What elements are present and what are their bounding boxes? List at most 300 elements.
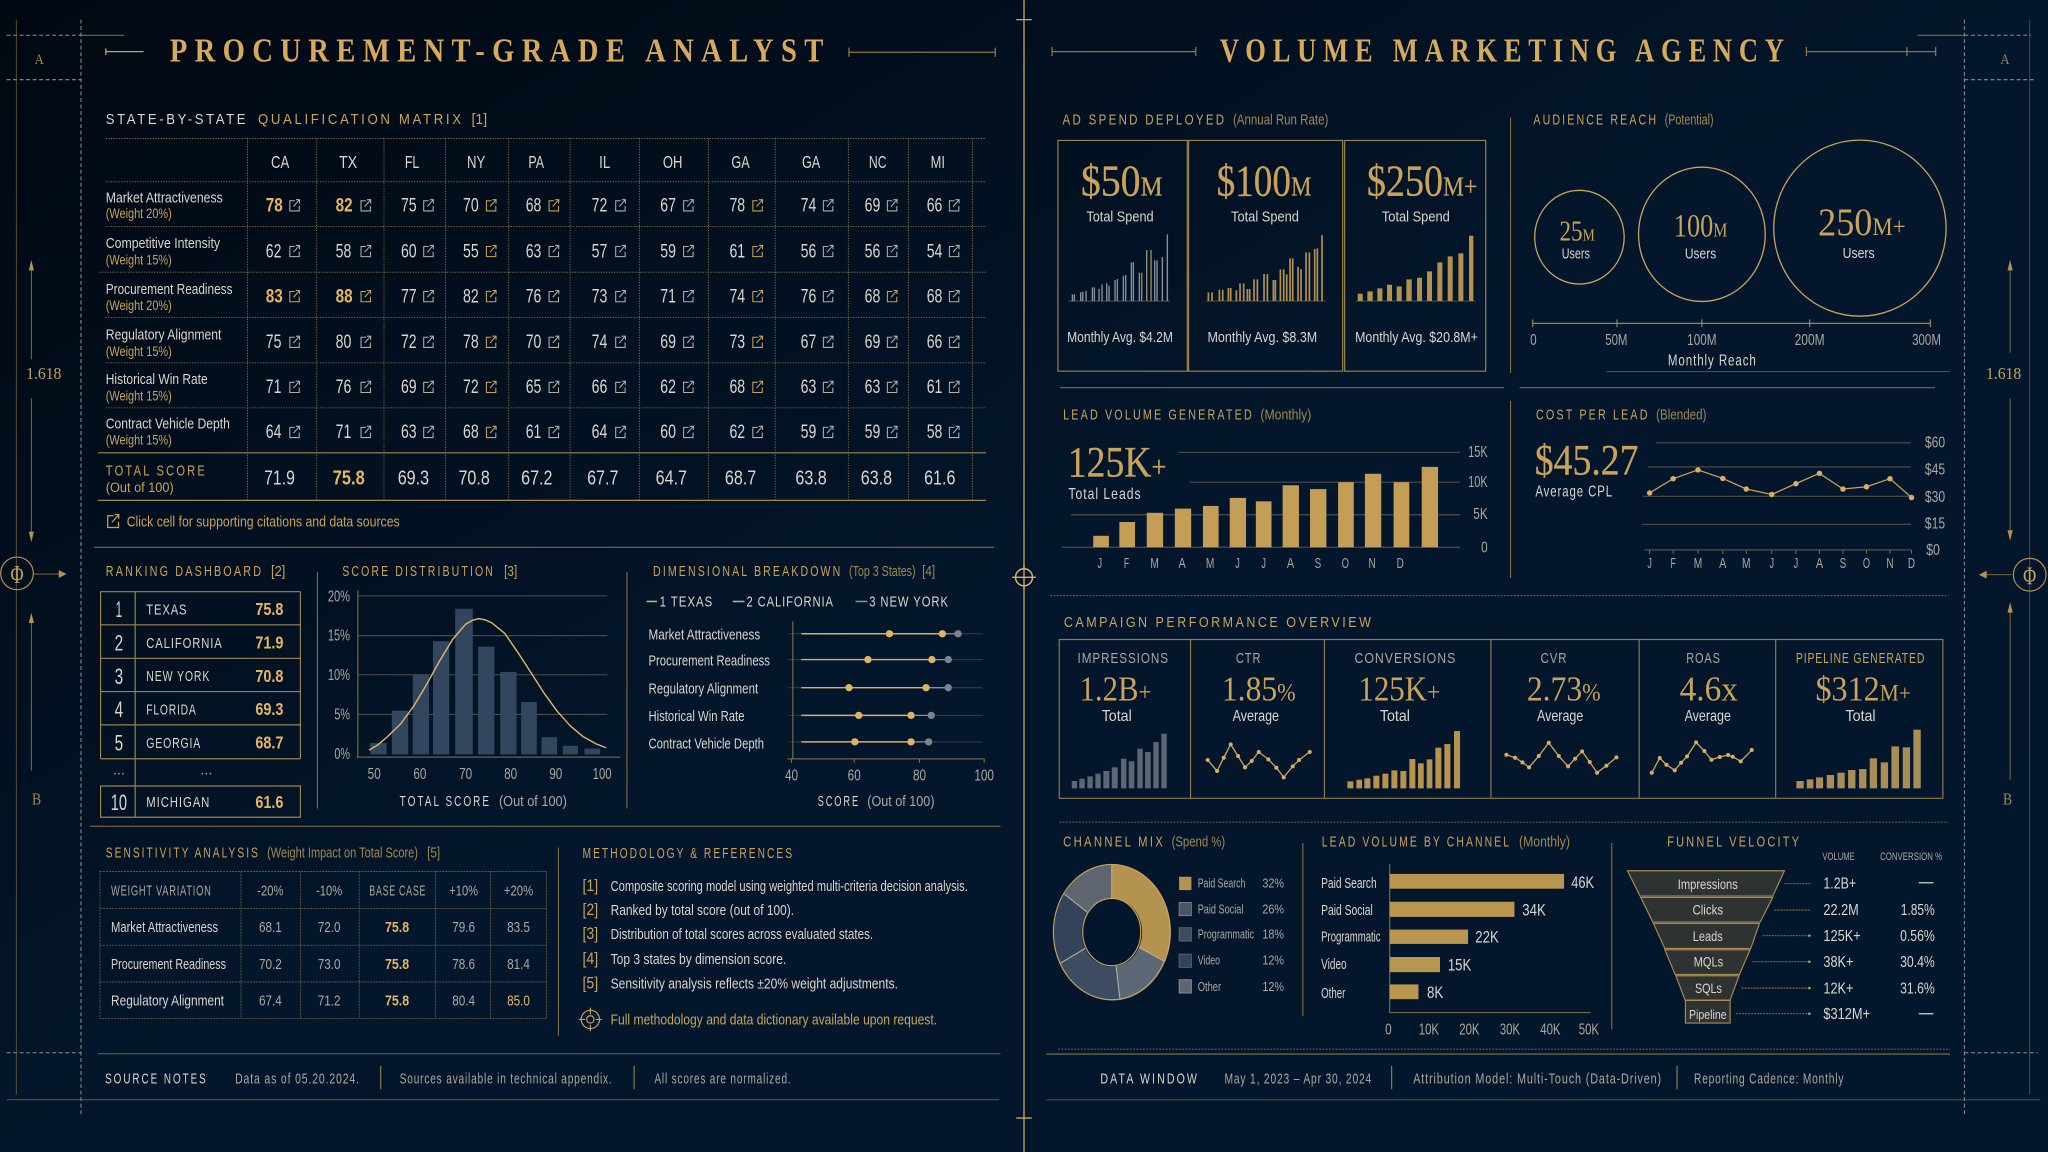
- panel: state-by-state qualification matrix: [98, 111, 986, 530]
- chart: lead volume by channel: Paid Search: [1321, 876, 1377, 892]
- row labels: (Weight 20%): [106, 206, 172, 221]
- row labels: TOTAL SCORE: [106, 462, 207, 479]
- matrix values: 55: [463, 241, 479, 262]
- matrix values: 75: [266, 332, 281, 353]
- matrix values: 70: [526, 332, 541, 353]
- matrix values: 59: [865, 422, 880, 443]
- column headers: CA: [271, 152, 289, 172]
- panel: lead volume generated: O: [1342, 556, 1349, 572]
- matrix values: 69: [660, 332, 676, 353]
- donut legend: 18%: [1262, 928, 1284, 942]
- matrix values: 83: [266, 286, 283, 307]
- chart: funnel velocity: 31.6%: [1900, 980, 1935, 997]
- matrix values: 72: [592, 196, 607, 217]
- panel: audience reach: [1530, 112, 1950, 372]
- kpi: ctr: CTR: [1236, 651, 1261, 667]
- panel: sensitivity analysis: +10%: [449, 883, 478, 899]
- total score row: 67.7: [587, 468, 618, 490]
- column headers: GA: [731, 152, 750, 172]
- card: $50M: Total Spend: [1086, 209, 1154, 225]
- panel: lead volume generated: J: [1261, 556, 1266, 572]
- kpi: roas: Average: [1685, 708, 1731, 725]
- panel: cost per lead: COST PER LEAD: [1536, 406, 1650, 423]
- footer: source notes: Sources available in technical appendix.: [400, 1071, 613, 1087]
- chart: dimensional breakdown dumbbell: Regulatory Alignment: [648, 682, 758, 698]
- chart: score distribution histogram: 5%: [334, 707, 350, 724]
- chart: score distribution histogram: 0%: [334, 746, 350, 763]
- chart: lead volume by channel: 50K: [1579, 1021, 1599, 1038]
- kpi: impressions: [1072, 651, 1169, 788]
- chart: funnel velocity: [1627, 833, 1942, 1023]
- chart: lead volume by channel: Other: [1321, 986, 1345, 1002]
- chart: funnel velocity: Impressions: [1678, 876, 1738, 892]
- donut legend: 12%: [1262, 954, 1284, 968]
- matrix values: 66: [927, 196, 942, 217]
- panel: campaign performance overview: [1059, 614, 1943, 798]
- left frame rail: Φ: [10, 562, 24, 589]
- legend: [647, 595, 949, 611]
- chart: funnel velocity: 12K+: [1823, 980, 1853, 997]
- panel: sensitivity analysis: -10%: [316, 883, 342, 899]
- panel: audience reach: AUDIENCE REACH: [1533, 112, 1658, 129]
- panel: ranking dashboard: [101, 563, 300, 817]
- row labels: (Weight 20%): [106, 298, 172, 313]
- matrix values: 71: [336, 422, 351, 443]
- card: $250M+: Monthly Avg. $20.8M+: [1355, 330, 1478, 346]
- panel: lead volume generated: 0: [1481, 539, 1488, 556]
- panel: ranking dashboard: 1: [116, 597, 122, 622]
- chart: score distribution histogram: 100: [593, 766, 612, 783]
- panel: ranking dashboard: 68.7: [255, 732, 284, 752]
- panel: sensitivity analysis: 80.4: [452, 994, 475, 1010]
- chart: dimensional breakdown dumbbell: [647, 563, 994, 810]
- kpi: pipeline generated: [1796, 651, 1925, 788]
- matrix values: 67: [801, 332, 816, 353]
- chart: dimensional breakdown dumbbell: Contract Vehicle Depth: [648, 736, 764, 752]
- chart: lead volume by channel: 46K: [1571, 873, 1595, 892]
- matrix values: 77: [401, 286, 417, 307]
- kpi: conversions: Total: [1380, 708, 1410, 725]
- footer: source notes: SOURCE NOTES: [105, 1070, 208, 1087]
- card: $250M+: Total Spend: [1382, 209, 1450, 225]
- panel: lead volume generated: N: [1368, 556, 1376, 572]
- panel: sensitivity analysis: WEIGHT VARIATION: [111, 883, 212, 899]
- kpi: pipeline generated: PIPELINE GENERATED: [1796, 651, 1925, 667]
- chart: funnel velocity: CONVERSION %: [1880, 851, 1942, 863]
- donut legend: Paid Social: [1198, 902, 1243, 916]
- panel: sensitivity analysis: 75.8: [385, 920, 409, 936]
- chart: funnel velocity: Clicks: [1692, 901, 1723, 917]
- panel: methodology and references: [2]: [583, 901, 598, 919]
- card: $250M+: [1355, 155, 1478, 346]
- matrix values: 61: [526, 422, 541, 443]
- panel: cost per lead: (Blended): [1656, 407, 1706, 423]
- matrix values: 62: [266, 241, 281, 262]
- total score row: 64.7: [656, 468, 687, 490]
- panel: audience reach: 100M: [1674, 208, 1727, 244]
- panel: cost per lead: J: [1794, 556, 1798, 572]
- column headers: FL: [405, 152, 419, 172]
- panel: channel mix donut: CHANNEL MIX: [1063, 833, 1165, 850]
- panel: ranking dashboard: 69.3: [255, 699, 284, 719]
- matrix values: 56: [865, 241, 880, 262]
- chart: lead volume by channel: Programmatic: [1321, 930, 1381, 946]
- panel: cost per lead: O: [1863, 556, 1870, 572]
- panel: campaign performance overview: CAMPAIGN PERFORMANCE OVERVIEW: [1064, 614, 1373, 631]
- matrix values: 69: [865, 332, 880, 353]
- panel: ad spend deployed: (Annual Run Rate): [1233, 113, 1328, 129]
- panel: lead volume generated: LEAD VOLUME GENERATED: [1063, 406, 1254, 423]
- chart: funnel velocity: SQLs: [1695, 980, 1722, 996]
- panel: audience reach: 250M+: [1818, 201, 1906, 244]
- card: $100M: $100M: [1217, 155, 1311, 205]
- panel: audience reach: Users: [1562, 247, 1590, 263]
- chart: lead volume by channel: 0: [1385, 1021, 1392, 1038]
- funnel stages: [1627, 871, 1784, 1023]
- left frame rail: B: [32, 790, 41, 809]
- donut legend: 12%: [1262, 980, 1284, 994]
- heading: matrix: [1]: [472, 112, 487, 128]
- kpi: impressions: 1.2B+: [1080, 669, 1151, 708]
- matrix values: 63: [526, 241, 541, 262]
- panel: ranking dashboard: 10: [111, 790, 127, 815]
- chart: funnel velocity: Leads: [1693, 928, 1723, 944]
- chart: score distribution histogram: 80: [504, 766, 517, 783]
- donut legend: Paid Search: [1198, 877, 1245, 891]
- panel: ranking dashboard: CALIFORNIA: [146, 636, 223, 652]
- left frame rail: 1.618: [26, 364, 61, 383]
- panel: channel mix donut: [1053, 833, 1284, 1001]
- panel: sensitivity analysis: 72.0: [318, 920, 341, 936]
- chart: score distribution histogram: 60: [413, 766, 427, 783]
- kpi: ctr: Average: [1233, 708, 1279, 725]
- card: $100M: [1206, 155, 1326, 346]
- panel: sensitivity analysis: -20%: [257, 883, 284, 899]
- panel: ranking dashboard: 5: [115, 730, 123, 755]
- chart: funnel velocity: 125K+: [1823, 928, 1861, 945]
- chart: funnel velocity: 1.2B+: [1823, 875, 1856, 892]
- matrix values: 69: [865, 196, 880, 217]
- panel: ranking dashboard: 4: [115, 697, 123, 722]
- panel: methodology and references: [4]: [583, 950, 598, 968]
- chart: dimensional breakdown dumbbell: (Top 3 States): [849, 564, 916, 580]
- matrix values: 63: [865, 377, 880, 398]
- center axis with crosshair: [1012, 0, 1036, 1152]
- card: $50M: $50M: [1081, 155, 1162, 205]
- matrix values: 73: [592, 286, 607, 307]
- panel: ranking dashboard: NEW YORK: [146, 669, 210, 685]
- total score row: 71.9: [264, 468, 295, 490]
- heading: matrix: QUALIFICATION MATRIX: [258, 111, 464, 128]
- panel: methodology and references: Ranked by total score (out of 100).: [611, 903, 794, 919]
- kpi: conversions: [1347, 651, 1460, 788]
- panel: cost per lead: J: [1769, 556, 1774, 572]
- chart: lead volume by channel: 22K: [1475, 927, 1499, 946]
- title: procurement-grade analyst: PROCUREMENT-GRADE ANALYST: [170, 32, 831, 69]
- chart: lead volume by channel: 20K: [1459, 1021, 1480, 1038]
- panel: sensitivity analysis: 81.4: [507, 957, 530, 973]
- panel: methodology and references: [5]: [583, 975, 598, 993]
- title: volume marketing agency: VOLUME MARKETING AGENCY: [1220, 32, 1791, 69]
- panel: sensitivity analysis: Regulatory Alignment: [111, 994, 224, 1010]
- matrix values: 64: [266, 422, 281, 443]
- total score row: 68.7: [725, 468, 756, 490]
- chart: dimensional breakdown dumbbell: Market Attractiveness: [648, 627, 760, 643]
- kpi: ctr: [1206, 651, 1312, 779]
- panel: methodology and references: [3]: [583, 925, 598, 943]
- matrix values: 63: [801, 377, 816, 398]
- matrix values: 62: [729, 422, 745, 443]
- matrix values: 82: [336, 196, 353, 217]
- chart: lead volume by channel: 34K: [1522, 901, 1546, 920]
- row labels: (Weight 15%): [106, 344, 172, 359]
- panel: ranking dashboard: 71.9: [255, 632, 284, 652]
- matrix values: 57: [592, 241, 607, 262]
- chart: funnel velocity: VOLUME: [1822, 851, 1855, 863]
- matrix values: 54: [927, 241, 942, 262]
- panel: cost per lead: Average CPL: [1535, 483, 1613, 500]
- matrix values: 68: [526, 196, 541, 217]
- panel: methodology and references: [1]: [583, 877, 598, 895]
- panel: cost per lead: [1535, 406, 1945, 572]
- footer: data window: May 1, 2023 – Apr 30, 2024: [1224, 1071, 1372, 1087]
- chart: dimensional breakdown dumbbell: 40: [785, 767, 798, 784]
- column headers: MI: [931, 152, 945, 172]
- chart: lead volume by channel: 10K: [1419, 1021, 1439, 1038]
- kpi: pipeline generated: Total: [1846, 708, 1876, 725]
- panel: sensitivity analysis: 85.0: [507, 994, 530, 1010]
- chart: lead volume by channel: 30K: [1500, 1021, 1520, 1038]
- heading: matrix: [106, 111, 487, 128]
- donut legend: [1179, 877, 1284, 994]
- panel: methodology and references: Full methodology and data dictionary available upon request.: [611, 1013, 937, 1029]
- panel: methodology and references: Distribution of total scores across evaluated states.: [611, 927, 873, 943]
- chart: score distribution histogram: SCORE DISTRIBUTION: [342, 563, 495, 580]
- chart: score distribution histogram: [328, 563, 620, 810]
- matrix values: 62: [660, 377, 676, 398]
- panel: sensitivity analysis: [100, 844, 547, 1019]
- total score row: 69.3: [398, 468, 429, 490]
- panel: lead volume generated: 15K: [1468, 444, 1488, 461]
- panel: ad spend deployed: [1058, 112, 1486, 371]
- heading: matrix: STATE-BY-STATE: [106, 111, 248, 128]
- panel: methodology and references: Top 3 states by dimension score.: [611, 952, 786, 968]
- footer: source notes: All scores are normalized.: [654, 1071, 792, 1087]
- kpi: cvr: CVR: [1541, 651, 1567, 667]
- kpi: roas: 4.6x: [1680, 669, 1738, 708]
- footer: source notes: Data as of 05.20.2024.: [235, 1071, 360, 1087]
- chart: lead volume by channel: 8K: [1427, 983, 1444, 1002]
- panel: methodology and references: Composite scoring model using weighted multi-criteria decision analysis.: [611, 879, 968, 895]
- footer: data window: Attribution Model: Multi-Touch (Data-Driven): [1413, 1071, 1662, 1087]
- card: $100M: Total Spend: [1231, 209, 1299, 225]
- chart: dimensional breakdown dumbbell: (Out of 100): [867, 794, 935, 810]
- chart: score distribution histogram: (Out of 100): [499, 794, 567, 810]
- matrix values: 63: [401, 422, 417, 443]
- scale axis: 300M: [1912, 332, 1941, 349]
- kpi: impressions: Total: [1102, 708, 1132, 725]
- chart: score distribution histogram: [3]: [504, 564, 517, 580]
- panel: ad spend deployed: AD SPEND DEPLOYED: [1063, 112, 1226, 129]
- panel: cost per lead: $0: [1926, 542, 1940, 559]
- matrix values: 60: [401, 241, 417, 262]
- footer: data window: DATA WINDOW: [1100, 1070, 1199, 1087]
- chart: dimensional breakdown dumbbell: [4]: [922, 564, 935, 580]
- card: $100M: Monthly Avg. $8.3M: [1208, 330, 1317, 346]
- column headers: NY: [467, 152, 485, 172]
- matrix values: 61: [927, 377, 942, 398]
- card: $250M+: $250M+: [1367, 155, 1477, 205]
- chart: lead volume by channel: 15K: [1448, 955, 1472, 974]
- panel: lead volume generated: [1062, 406, 1488, 572]
- panel: cost per lead: A: [1719, 556, 1727, 572]
- row labels: (Weight 15%): [106, 252, 172, 267]
- panel: sensitivity analysis: 68.1: [259, 920, 282, 936]
- chart: score distribution histogram: 90: [549, 766, 562, 783]
- panel: lead volume generated: F: [1124, 556, 1129, 572]
- panel: sensitivity analysis: Market Attractiveness: [111, 920, 218, 936]
- right frame rail: Φ: [2023, 563, 2036, 590]
- panel: sensitivity analysis: 83.5: [507, 920, 530, 936]
- row labels: Regulatory Alignment: [106, 328, 221, 344]
- row labels: Historical Win Rate: [106, 372, 208, 388]
- row labels: (Weight 15%): [106, 388, 172, 403]
- right frame rail: B: [2003, 790, 2012, 809]
- matrix values: 61: [729, 241, 745, 262]
- kpi: roas: [1650, 651, 1754, 775]
- matrix values: 76: [336, 377, 351, 398]
- chart: dimensional breakdown dumbbell: Historical Win Rate: [648, 709, 744, 725]
- panel: methodology and references: METHODOLOGY & REFERENCES: [583, 845, 794, 862]
- panel: sensitivity analysis: 70.2: [259, 957, 282, 973]
- scale axis: Monthly Reach: [1668, 353, 1757, 370]
- panel: lead volume generated: J: [1097, 556, 1102, 572]
- kpi: roas: ROAS: [1686, 651, 1721, 667]
- row labels: Contract Vehicle Depth: [106, 416, 230, 432]
- matrix values: 82: [463, 286, 479, 307]
- panel: methodology and references: [579, 845, 968, 1031]
- chart: dimensional breakdown dumbbell: SCORE: [818, 793, 860, 810]
- panel: ranking dashboard: ...: [113, 763, 125, 779]
- column headers: NC: [869, 152, 887, 172]
- panel: lead volume generated: (Monthly): [1260, 407, 1311, 423]
- chart: dimensional breakdown dumbbell: 80: [913, 767, 926, 784]
- panel: sensitivity analysis: BASE CASE: [369, 883, 426, 899]
- matrix values: 76: [801, 286, 816, 307]
- matrix values: 65: [526, 377, 541, 398]
- total score row: [264, 468, 955, 490]
- column headers: PA: [528, 152, 544, 172]
- scale axis: [1530, 319, 1950, 372]
- chart: funnel velocity: 1.85%: [1901, 902, 1935, 919]
- panel: cost per lead: $15: [1925, 516, 1945, 533]
- scale axis: 100M: [1687, 332, 1717, 349]
- matrix values: 75: [401, 196, 417, 217]
- chart: funnel velocity: 22.2M: [1823, 902, 1859, 919]
- chart: score distribution histogram: 15%: [328, 628, 350, 645]
- row labels: Market Attractiveness: [106, 190, 223, 206]
- panel: lead volume generated: 10K: [1468, 474, 1488, 491]
- matrix values: 78: [729, 196, 745, 217]
- matrix values: 66: [592, 377, 607, 398]
- panel: cost per lead: M: [1742, 556, 1751, 572]
- total score row: 63.8: [861, 468, 892, 490]
- chart: score distribution histogram: 50: [368, 766, 381, 783]
- kpi: impressions: IMPRESSIONS: [1078, 651, 1169, 667]
- panel: sensitivity analysis: 79.6: [452, 920, 475, 936]
- panel: cost per lead: $45: [1925, 461, 1945, 478]
- panel: cost per lead: M: [1694, 556, 1702, 572]
- donut legend: 32%: [1262, 877, 1284, 891]
- matrix values: 66: [927, 332, 942, 353]
- panel: cost per lead: F: [1671, 556, 1676, 572]
- chart: dimensional breakdown dumbbell: 100: [974, 767, 994, 784]
- kpi: conversions: CONVERSIONS: [1354, 651, 1456, 667]
- icon: target seal: [579, 1008, 602, 1031]
- panel: lead volume generated: J: [1235, 556, 1240, 572]
- chart: score distribution histogram: 20%: [328, 588, 350, 605]
- matrix values: 71: [660, 286, 676, 307]
- panel: sensitivity analysis: 75.8: [385, 994, 409, 1010]
- row labels: Procurement Readiness: [106, 282, 232, 298]
- chart: funnel velocity: 30.4%: [1900, 954, 1935, 971]
- footer: data window: Reporting Cadence: Monthly: [1694, 1071, 1844, 1087]
- chart: lead volume by channel: (Monthly): [1519, 834, 1570, 850]
- chart: lead volume by channel: LEAD VOLUME BY CHANNEL: [1322, 833, 1511, 850]
- chart: dimensional breakdown dumbbell: DIMENSIONAL BREAKDOWN: [653, 563, 842, 580]
- panel: channel mix donut: (Spend %): [1172, 834, 1225, 850]
- matrix values: 58: [336, 241, 351, 262]
- citation link icons: [290, 200, 959, 438]
- matrix values: 73: [729, 332, 745, 353]
- panel: ranking dashboard: [2]: [271, 564, 285, 580]
- total score row: 61.6: [924, 468, 955, 490]
- matrix values: 78: [463, 332, 479, 353]
- matrix values: 72: [401, 332, 417, 353]
- footer: data window: [1046, 1049, 1950, 1089]
- matrix values: 68: [927, 286, 942, 307]
- left frame rail: A: [35, 52, 44, 68]
- kpi: cvr: [1504, 651, 1618, 775]
- panel: sensitivity analysis: 73.0: [318, 957, 341, 973]
- donut legend: Video: [1198, 954, 1220, 968]
- column headers: GA: [802, 152, 820, 172]
- right frame rail: 1.618: [1986, 364, 2021, 383]
- column headers: TX: [339, 152, 357, 172]
- panel: ranking dashboard: FLORIDA: [146, 702, 197, 718]
- panel: sensitivity analysis: +20%: [504, 883, 533, 899]
- right frame rail: [1046, 20, 2046, 1114]
- panel: cost per lead: $60: [1925, 434, 1945, 451]
- chart: lead volume by channel: Paid Social: [1321, 903, 1373, 919]
- chart: funnel velocity: MQLs: [1694, 953, 1723, 969]
- panel: lead volume generated: A: [1178, 556, 1186, 572]
- matrix values: 68: [729, 377, 745, 398]
- panel: lead volume generated: S: [1315, 556, 1321, 572]
- panel: ranking dashboard: 3: [115, 664, 123, 689]
- panel: cost per lead: N: [1886, 556, 1894, 572]
- click note: Click cell for supporting citations and data sources: [127, 514, 400, 530]
- panel: audience reach: Users: [1685, 247, 1716, 263]
- panel: ranking dashboard: RANKING DASHBOARD: [106, 563, 263, 580]
- matrix values: 88: [336, 286, 353, 307]
- panel: ranking dashboard: 61.6: [255, 792, 284, 812]
- panel: sensitivity analysis: [5]: [427, 845, 440, 861]
- matrix values: 72: [463, 377, 479, 398]
- card: $50M: Monthly Avg. $4.2M: [1067, 330, 1173, 346]
- card: $50M: [1067, 155, 1173, 346]
- row labels: (Out of 100): [106, 480, 174, 495]
